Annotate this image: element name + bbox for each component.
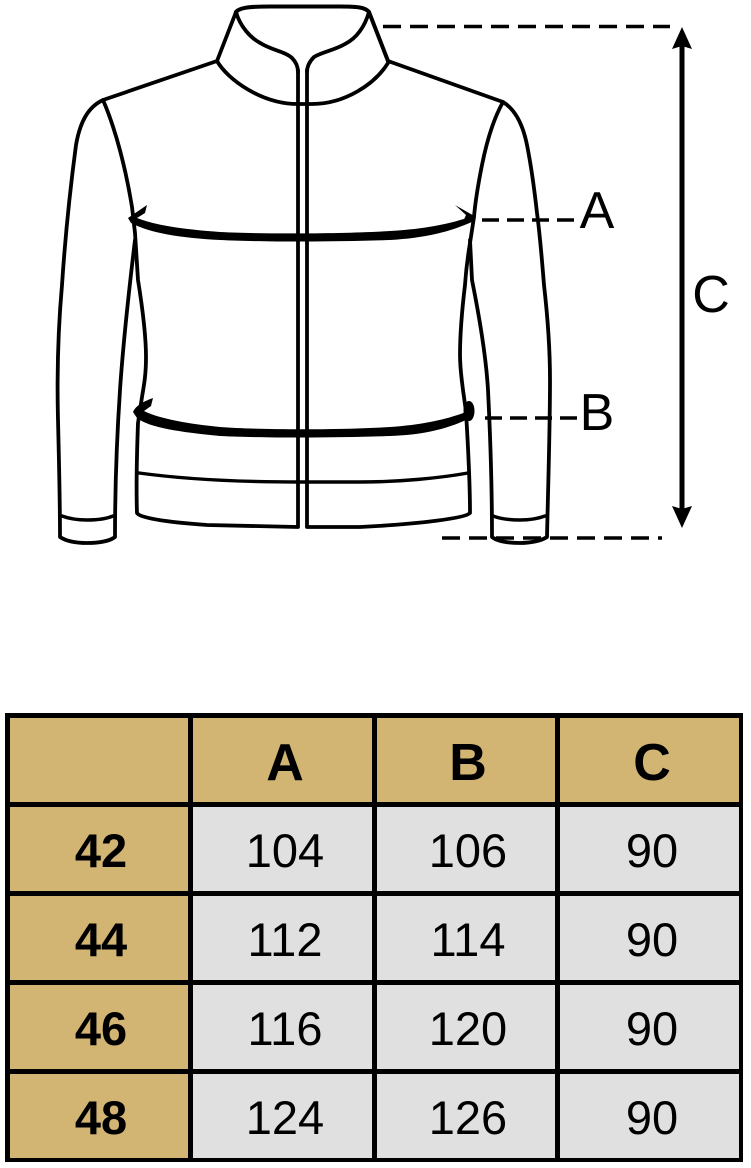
row size 44: 44 <box>75 913 127 966</box>
row size 44: 114 <box>431 913 505 966</box>
table header row: A <box>266 734 304 792</box>
row size 48: 90 <box>626 1091 678 1144</box>
right sleeve <box>388 61 550 543</box>
collar <box>217 6 388 104</box>
left sleeve <box>58 61 217 543</box>
row size 42 <box>75 824 678 877</box>
arrow C <box>672 27 692 528</box>
label B: B <box>580 384 614 442</box>
hem line <box>139 473 468 482</box>
row size 42: 42 <box>75 824 127 877</box>
left armhole and body side <box>103 100 298 527</box>
label C: C <box>692 266 730 324</box>
row size 44: 90 <box>626 913 678 966</box>
table header row: C <box>633 734 671 792</box>
zipper <box>298 70 307 526</box>
size table <box>5 713 743 1162</box>
row size 44 <box>75 913 678 966</box>
row size 42: 90 <box>626 824 678 877</box>
row size 48: 48 <box>75 1091 127 1144</box>
row size 44: 112 <box>248 913 322 966</box>
row size 42: 106 <box>429 824 507 877</box>
row size 48: 124 <box>246 1091 324 1144</box>
jacket measurement diagram <box>58 6 730 543</box>
table header row <box>266 734 671 792</box>
row size 46: 116 <box>248 1002 322 1055</box>
label A: A <box>580 182 615 240</box>
cuffs <box>62 516 545 520</box>
table cell backgrounds <box>5 713 743 1162</box>
row size 46: 90 <box>626 1002 678 1055</box>
row size 46: 46 <box>75 1002 127 1055</box>
measurement curve A <box>128 205 476 242</box>
table header row: B <box>449 734 487 792</box>
jacket outline <box>58 6 550 543</box>
row size 42: 104 <box>246 824 324 877</box>
right armhole and body side <box>307 102 503 527</box>
row size 48: 126 <box>429 1091 507 1144</box>
dashed guides <box>383 26 670 538</box>
row size 46 <box>75 1002 678 1055</box>
row size 48 <box>75 1091 678 1144</box>
measurement curve B <box>133 398 474 438</box>
row size 46: 120 <box>429 1002 507 1055</box>
